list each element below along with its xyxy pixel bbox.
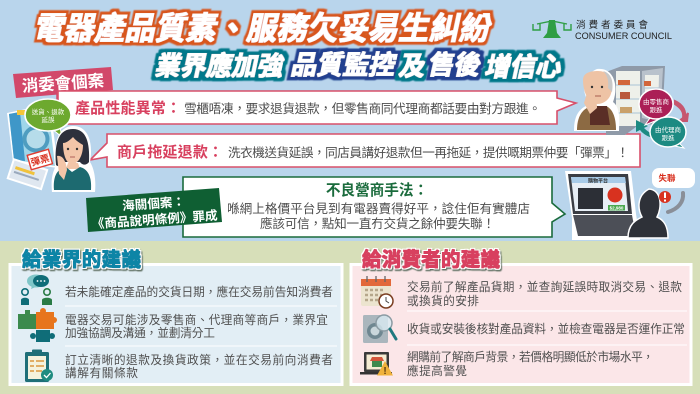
speech bubble: agent: 跟進 [662, 133, 675, 142]
title line 2: 及 [397, 51, 429, 81]
customs case tag: 海關個案： [122, 194, 185, 213]
customs case tag: 《商品說明條例》罪成 [91, 208, 218, 231]
speech bubble: retailer: 由零售商 [643, 97, 670, 106]
old man [574, 69, 619, 131]
callout: delayed refund: 洗衣機送貨延誤，同店員講好退款但一再拖延，提供嘅期票仲要「彈票」！ [228, 145, 629, 160]
logo: Consumer Council: 消費者委員會 [576, 19, 648, 31]
advice item 3: 網購前了解商戶背景，若價格明顯低於市場水平， [407, 350, 654, 364]
logo: Consumer Council: CONSUMER COUNCIL [575, 31, 672, 41]
advice item 2 [363, 315, 685, 343]
panel: advice for the trade [10, 248, 342, 384]
title line 1: 電器產品質素、服務欠妥易生糾紛 [32, 11, 495, 46]
speech bubble: delivery and refund delay [25, 99, 71, 137]
advice item 3: 應提高警覺 [407, 364, 467, 378]
title line 2 [153, 50, 565, 82]
speech bubble: retailer: 跟進 [650, 105, 663, 114]
advice item 2: 電器交易可能涉及零售商、代理商等商戶，業界宜 [65, 313, 328, 327]
fridge [606, 66, 665, 135]
icon: washing machine, cheque and woman [6, 99, 95, 192]
advice item 2: 加強協調及溝通，並劃清分工 [65, 326, 215, 340]
washing machine [7, 104, 58, 168]
callout: product performance: 產品性能異常： [75, 99, 181, 117]
callout heading: 不良營商手法： [326, 181, 428, 199]
advice item 1: 若未能確定產品的交貨日期，應在交易前告知消費者 [65, 285, 333, 299]
stamp: bounced cheque: 彈票 [30, 153, 51, 169]
case tag: 消委會個案 [21, 70, 105, 96]
panel: advice for consumers [351, 248, 691, 384]
title line 2: 業界應加強 [153, 51, 287, 81]
advice item 1 [21, 274, 333, 305]
speech bubble: agent: 由代理商 [655, 125, 682, 134]
advice item 1 [361, 276, 682, 308]
case tag [13, 67, 113, 108]
advice item 3: 講解有關條款 [65, 366, 138, 380]
callout: delayed refund [90, 134, 640, 167]
speech bubble: delivery and refund delay: 送貨、退款 [32, 107, 65, 116]
arrows [636, 101, 688, 138]
advice item 3: 訂立清晰的退款及換貨政策，並在交易前向消費者 [65, 353, 333, 367]
advice item 1: 或換貨的安排 [407, 294, 479, 308]
advice item 2 [18, 308, 328, 342]
callout: product performance: 雪櫃唔凍，要求退貨退款，但零售商同代理商都話要由對方跟進。 [184, 101, 541, 116]
customs case tag [86, 188, 222, 232]
callout: unfair trade practice [183, 177, 565, 237]
callout: product performance [58, 91, 576, 124]
laptop: 購物平台 [588, 178, 608, 184]
title line 2: 品質監控 [289, 50, 399, 80]
laptop: $2,980 [610, 206, 624, 210]
advice item 2: 收貨或安裝後核對產品資料，並檢查電器是否運作正常 [407, 322, 685, 336]
heading: advice for the trade: 給業界的建議 [22, 248, 141, 271]
woman [52, 126, 95, 192]
callout body [227, 201, 530, 231]
icon: laptop and silhouette [565, 168, 695, 240]
advice item 3 [360, 350, 654, 378]
title line 2: 售後 [426, 50, 484, 80]
silhouette [628, 189, 668, 238]
advice item 1: 交易前了解產品貨期，並查詢延誤時取消交易、退款 [407, 280, 682, 294]
title line 2: 增信心 [483, 52, 565, 82]
callout body: 應該可信，點知一直冇交貨之餘仲要失聯！ [260, 216, 495, 231]
icon: old man with broken fridge [574, 66, 688, 148]
laptop [565, 171, 640, 240]
callout: delayed refund: 商戶拖延退款： [117, 143, 223, 161]
advice item 3 [25, 350, 333, 382]
cheque [6, 158, 48, 190]
callout body: 喺網上格價平台見到有電器賣得好平，諗住佢有實體店 [227, 201, 530, 216]
logo: Consumer Council [533, 19, 672, 41]
icon: alert and phone [659, 191, 683, 212]
speech bubble: retailer [639, 89, 673, 125]
speech bubble: agent [650, 117, 686, 148]
speech bubble: delivery and refund delay: 延誤 [42, 115, 55, 124]
advice item 3: ! [383, 366, 387, 377]
speech bubble: lost contact: 失聯 [658, 173, 676, 183]
heading: advice for consumers: 給消費者的建議 [362, 248, 500, 271]
title [32, 11, 565, 82]
